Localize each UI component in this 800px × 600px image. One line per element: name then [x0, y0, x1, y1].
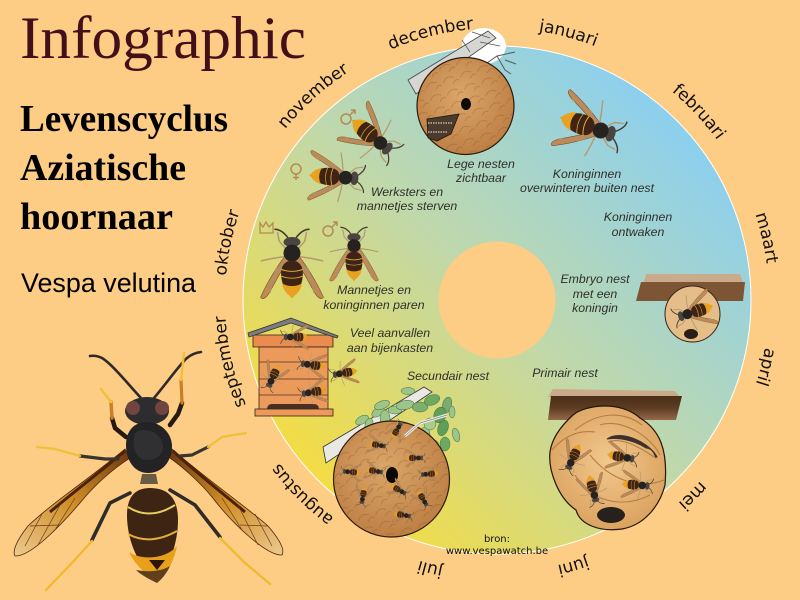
caption: Koninginnen overwinteren buiten nest	[520, 167, 655, 195]
month labels	[214, 18, 778, 579]
caption: Embryo nest met een koningin	[560, 272, 630, 315]
caption: Werksters en mannetjes sterven: Werksters en	[371, 185, 443, 199]
month labels: augustus	[272, 464, 332, 524]
caption: Koninginnen overwinteren buiten nest: overwinteren buiten nest	[520, 181, 655, 195]
month labels: september	[215, 316, 246, 407]
illustration: dying worker and male	[307, 101, 411, 204]
illustration: embryo nest	[636, 274, 745, 342]
month labels: april	[756, 348, 774, 386]
month labels: oktober	[214, 208, 238, 274]
caption: Koninginnen ontwaken: ontwaken	[612, 225, 664, 239]
icon: crown	[260, 222, 273, 233]
caption: Secundair nest: Secundair nest	[407, 369, 490, 383]
month labels: maart	[756, 213, 778, 264]
caption: Mannetjes en koninginnen paren: Mannetjes en	[337, 283, 411, 297]
icon: male symbol	[341, 110, 355, 124]
caption: Mannetjes en koninginnen paren	[323, 283, 425, 312]
caption: Veel aanvallen aan bijenkasten	[347, 326, 433, 355]
month labels: januari	[538, 18, 598, 46]
subtitle: Vespa velutina: Vespa velutina	[21, 268, 197, 298]
caption: Lege nesten zichtbaar: zichtbaar	[455, 171, 507, 185]
illustration: beehive under attack	[248, 318, 359, 416]
heading: Levenscyclus Aziatische hoornaar: Aziatische	[20, 147, 186, 189]
illustration: empty nest on branch	[408, 28, 516, 154]
caption: Koninginnen overwinteren buiten nest: Koninginnen	[553, 167, 621, 181]
caption: Embryo nest met een koningin: Embryo nest	[560, 272, 630, 286]
month labels: juni	[558, 553, 590, 578]
heading: Levenscyclus Aziatische hoornaar	[20, 98, 228, 238]
illustration: hibernating queen	[551, 89, 631, 166]
photo: Asian hornet	[14, 352, 283, 590]
illustration: primary nest	[548, 389, 682, 530]
caption: Koninginnen ontwaken: Koninginnen	[604, 210, 672, 224]
centre hole	[438, 242, 556, 358]
month labels: februari	[673, 84, 727, 139]
icon: female symbol	[291, 164, 301, 180]
month labels: mei	[679, 482, 706, 512]
source credit	[446, 534, 548, 557]
month labels: november	[279, 64, 346, 128]
caption: Veel aanvallen aan bijenkasten: Veel aanvallen	[350, 326, 430, 340]
title: Infographic	[20, 5, 306, 71]
caption: Werksters en mannetjes sterven: mannetjes sterven	[357, 199, 457, 213]
caption: Embryo nest met een koningin: met een	[573, 287, 617, 301]
illustration: queen and male mating	[261, 227, 378, 299]
panel: life cycle disc	[243, 46, 751, 554]
caption: Werksters en mannetjes sterven	[357, 185, 457, 213]
month labels: juli	[417, 561, 444, 579]
caption: Lege nesten zichtbaar: Lege nesten	[447, 157, 515, 171]
caption: Mannetjes en koninginnen paren: koninginnen paren	[323, 298, 425, 312]
month labels: december	[389, 20, 473, 48]
icon: male symbol	[323, 222, 337, 236]
source credit: www.vespawatch.be	[446, 546, 548, 557]
source credit: bron:	[484, 534, 510, 545]
caption: Primair nest: Primair nest	[532, 366, 598, 380]
heading: Levenscyclus Aziatische hoornaar: Levenscyclus	[20, 98, 228, 140]
caption: Embryo nest met een koningin: koningin	[572, 301, 618, 315]
illustration: secondary nest on branch with leaves	[323, 387, 461, 537]
caption: Koninginnen ontwaken	[604, 210, 672, 239]
heading: Levenscyclus Aziatische hoornaar: hoornaar	[20, 196, 173, 238]
caption: Veel aanvallen aan bijenkasten: aan bijenkasten	[347, 341, 433, 355]
caption: Lege nesten zichtbaar	[447, 157, 515, 185]
